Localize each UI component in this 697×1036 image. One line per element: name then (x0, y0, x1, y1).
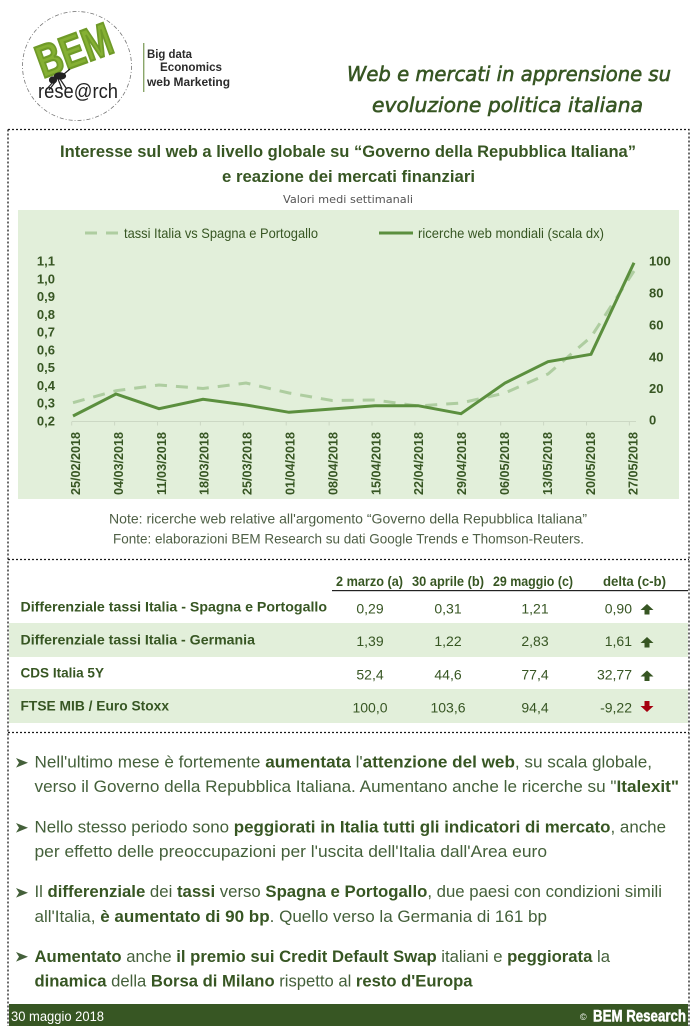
footer bar: 30 maggio 2018 (11, 1009, 104, 1024)
panel: indicators table (9, 574, 688, 723)
x axis dates: 22/04/2018 (412, 432, 426, 495)
x axis dates: 08/04/2018 (326, 432, 340, 495)
table header: 30 aprile (b) (412, 574, 484, 589)
bullet 3: Il differenziale dei tassi verso Spagna e Portogallo, due paesi con condizioni simili (34, 882, 662, 901)
row labels: FTSE MIB / Euro Stoxx (20, 698, 169, 714)
left axis labels: 0,3 (37, 396, 55, 411)
icon: up arrow (640, 637, 654, 648)
footer bar: © (580, 1012, 587, 1022)
left axis labels: 0,7 (37, 325, 55, 340)
chart notes: Note: ricerche web relative all'argomento “Governo della Repubblica Italiana” (109, 510, 587, 526)
series: tassi Italia vs Spagna e Portogallo (73, 271, 634, 406)
chart heading (60, 143, 636, 206)
panel: line chart (18, 210, 679, 499)
row values: 44,6 (434, 666, 462, 682)
row values: 1,39 (356, 633, 384, 649)
row labels: Differenziale tassi Italia - Germania (20, 632, 255, 648)
x axis dates: 18/03/2018 (198, 432, 212, 495)
row values: 0,90 (605, 600, 632, 616)
row values: 1,21 (521, 600, 549, 616)
x axis dates: 29/04/2018 (455, 432, 469, 495)
x axis dates: 11/03/2018 (155, 432, 169, 495)
chart heading: e reazione dei mercati finanziari (222, 168, 475, 186)
tagline: web Marketing (146, 75, 230, 89)
chart notes: Fonte: elaborazioni BEM Research su dati Google Trends e Thomson-Reuters. (113, 530, 584, 546)
row values: 2,83 (521, 633, 549, 649)
left axis labels: 1,0 (37, 272, 55, 286)
right axis labels: 100 (649, 254, 671, 269)
row values (352, 600, 632, 716)
left axis labels: 0,5 (37, 360, 55, 375)
chart heading: Valori medi settimanali (283, 194, 413, 206)
table header: 29 maggio (c) (493, 574, 573, 589)
row values: 77,4 (521, 666, 549, 682)
row values: 100,0 (352, 700, 388, 716)
x axis dates: 25/03/2018 (241, 432, 255, 495)
icon: up arrow (640, 670, 654, 681)
table header: 2 marzo (a) (336, 574, 403, 589)
row values: -9,22 (600, 700, 632, 716)
row values: 1,61 (605, 633, 632, 649)
bullet 4 (16, 947, 611, 990)
tagline: Economics (160, 60, 222, 74)
row values: 32,77 (597, 666, 632, 682)
left axis labels: 0,8 (37, 307, 55, 322)
x axis line and ticks (72, 422, 636, 426)
x axis dates: 01/04/2018 (284, 432, 298, 495)
x axis dates: 20/05/2018 (584, 432, 598, 495)
logo word research: rese@rch (38, 80, 118, 103)
bullet 1: verso il Governo della Repubblica Italiana. Aumentano anche le ricerche su " Italexit" (34, 777, 679, 796)
bullet 2: Nello stesso periodo sono peggiorati in Italia tutti gli indicatori di mercato, anche (34, 818, 666, 836)
row labels (20, 599, 327, 714)
tagline: Big data (147, 47, 192, 61)
header logo: BEM research (22, 12, 132, 120)
left axis labels: 0,2 (37, 414, 55, 428)
bullet 4: Aumentato anche il premio sui Credit Default Swap italiani e peggiorata la (34, 947, 611, 966)
bullet 1: Nell'ultimo mese è fortemente aumentata l'attenzione del web, su scala globale, (34, 753, 652, 772)
left axis labels: 1,1 (37, 254, 55, 269)
x axis dates: 04/03/2018 (112, 432, 126, 495)
bullet 4: dinamica della Borsa di Milano rispetto al resto d'Europa (34, 972, 473, 990)
right axis labels: 0 (649, 413, 656, 428)
row values: 0,29 (356, 600, 384, 616)
x axis dates: 06/05/2018 (498, 432, 512, 495)
main title: Web e mercati in apprensione su (347, 62, 671, 86)
chart heading: Interesse sul web a livello globale su “Governo della Repubblica Italiana” (60, 143, 636, 161)
x axis dates: 13/05/2018 (541, 432, 555, 495)
row values: 0,31 (434, 600, 462, 616)
chart legend (85, 225, 604, 241)
main title (347, 62, 671, 117)
series: ricerche web mondiali (73, 263, 634, 416)
x axis dates (69, 432, 641, 495)
icon: down arrow (640, 701, 654, 712)
row values: 103,6 (430, 700, 466, 716)
left axis labels: 0,9 (37, 289, 55, 304)
row values: 94,4 (521, 700, 549, 716)
table header (332, 574, 688, 591)
bullet 2 (16, 818, 666, 861)
right axis labels: 40 (649, 349, 663, 364)
x axis dates: 25/02/2018 (69, 432, 83, 495)
row values: 1,22 (434, 633, 462, 649)
left axis labels: 0,6 (37, 342, 55, 358)
right axis labels: 60 (649, 318, 663, 333)
row values: 52,4 (356, 666, 384, 682)
left axis labels (37, 254, 56, 428)
table header: delta (c-b) (603, 574, 666, 589)
x axis dates: 27/05/2018 (627, 432, 641, 495)
logo word BEM: BEM (28, 12, 120, 88)
logo ant (46, 69, 70, 90)
right axis labels: 80 (649, 286, 663, 301)
bullet list (16, 753, 679, 990)
icon: up arrow (640, 604, 654, 614)
bullet 3: all'Italia, è aumentato di 90 bp. Quello verso la Germania di 161 bp (34, 907, 547, 926)
bullet 1 (16, 753, 679, 796)
left axis labels: 0,4 (37, 378, 56, 393)
bullet 2: per effetto delle preoccupazioni per l'uscita dell'Italia dall'Area euro (34, 842, 547, 861)
chart legend: ricerche web mondiali (scala dx) (418, 225, 604, 241)
tagline (143, 43, 230, 92)
x axis dates: 15/04/2018 (369, 432, 383, 495)
row labels: CDS Italia 5Y (20, 665, 105, 681)
footer bar (9, 1004, 688, 1026)
right axis labels: 20 (649, 381, 663, 396)
chart notes (109, 510, 587, 546)
right axis labels (649, 254, 671, 428)
bullet 3 (16, 882, 662, 926)
row labels: Differenziale tassi Italia - Spagna e Portogallo (20, 599, 327, 615)
main title: evoluzione politica italiana (372, 93, 643, 117)
chart legend: tassi Italia vs Spagna e Portogallo (124, 225, 318, 241)
